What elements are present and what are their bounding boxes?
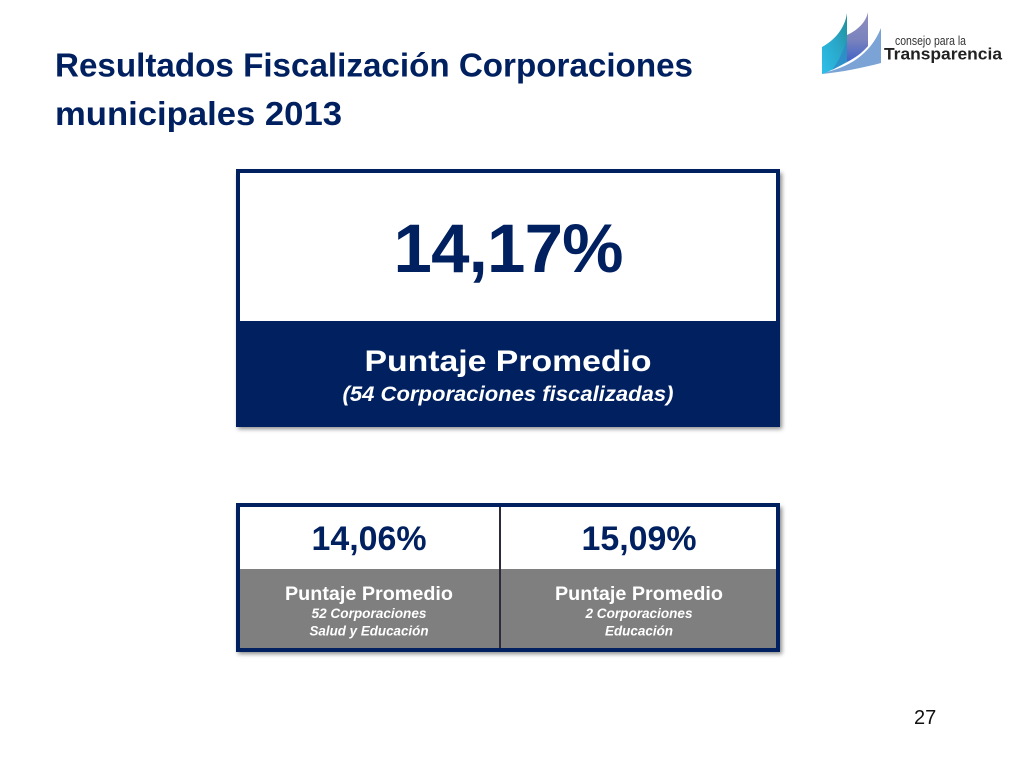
panel label: Puntaje Promedio <box>364 345 652 378</box>
panel label: (54 Corporaciones fiscalizadas) <box>342 382 674 406</box>
panel label <box>342 345 674 406</box>
big number: 14,17% <box>394 210 624 287</box>
left column: 52 corporations: 14,06% <box>312 520 426 558</box>
panel: overall average score <box>236 169 782 429</box>
right column: 2 corporations: Puntaje Promedio <box>555 583 723 605</box>
left column: 52 corporations: Salud y Educación <box>310 624 428 638</box>
left column: 52 corporations: 52 Corporaciones <box>312 606 427 621</box>
right column: 2 corporations: 15,09% <box>582 520 696 558</box>
title <box>55 46 693 132</box>
title: municipales 2013 <box>55 95 342 132</box>
logo text <box>884 34 1003 64</box>
logo text: Transparencia <box>884 46 1003 64</box>
left column: 52 corporations <box>285 520 453 638</box>
title: Resultados Fiscalización Corporaciones <box>55 46 693 84</box>
page number: 27 <box>914 707 936 729</box>
right column: 2 corporations: Educación <box>605 624 673 638</box>
right column: 2 corporations <box>555 520 723 638</box>
right column: 2 corporations: 2 Corporaciones <box>584 606 693 621</box>
icon: logo sails <box>822 12 881 74</box>
logo: Consejo para la Transparencia <box>822 12 1003 74</box>
logo text: consejo para la <box>895 34 966 48</box>
panel: score breakdown <box>236 503 782 654</box>
left column: 52 corporations: Puntaje Promedio <box>285 583 453 605</box>
